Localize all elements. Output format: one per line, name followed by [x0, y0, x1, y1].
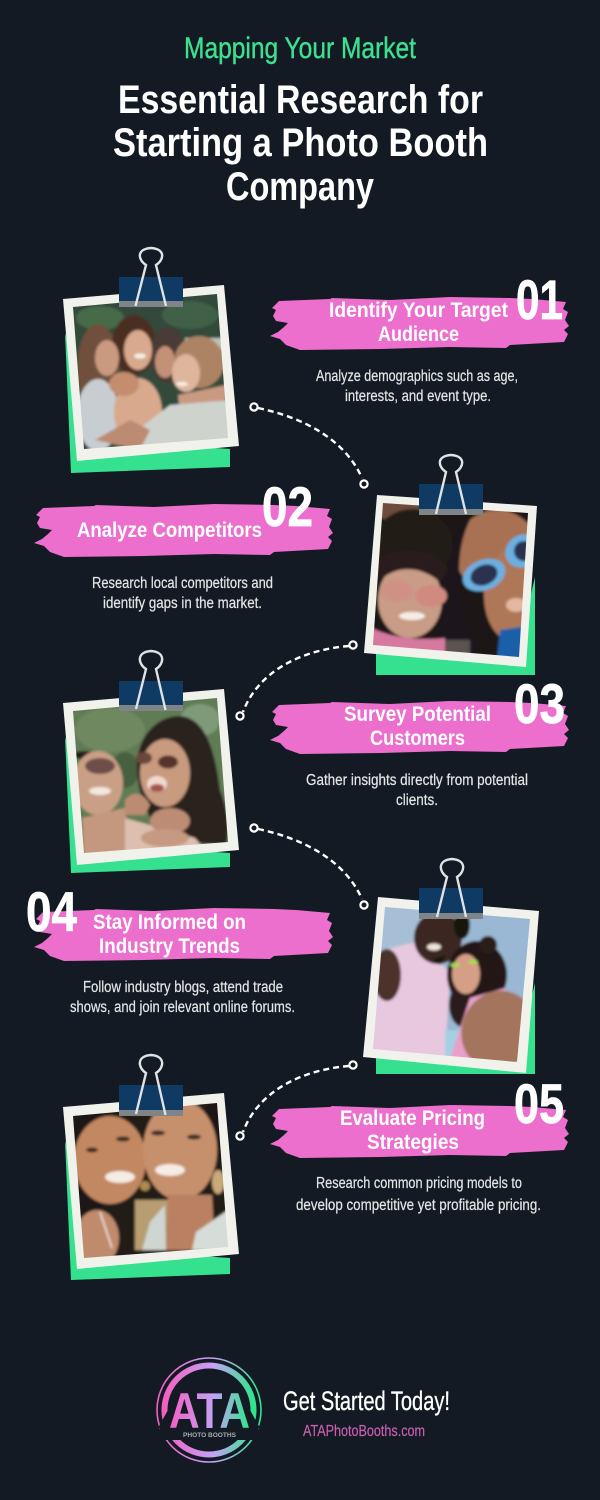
heading 5: Evaluate Pricing: [340, 1107, 485, 1130]
brush banner 1: [270, 297, 569, 350]
heading 1: [329, 299, 508, 346]
photo card 4: selfie couple: [363, 897, 548, 1081]
step 2: [34, 475, 333, 612]
number 04: 04: [26, 880, 77, 943]
number 01: 01: [516, 268, 563, 331]
heading 3: Customers: [370, 727, 465, 750]
description 3: Gather insights directly from potential: [306, 772, 528, 789]
call to action: [283, 1386, 450, 1440]
binder clip 2: [419, 455, 483, 515]
description 1: interests, and event type.: [345, 388, 491, 405]
photo card 3: laughing couple: [60, 689, 240, 873]
description 2: [92, 575, 273, 612]
header: [113, 32, 488, 209]
heading 3: [344, 703, 491, 750]
description 4: shows, and join relevant online forums.: [70, 999, 295, 1016]
binder clip 5: [119, 1055, 183, 1116]
brush banner 5: [270, 1105, 569, 1158]
description 2: Research local competitors and: [92, 575, 273, 592]
description 5: [296, 1175, 541, 1214]
brush banner 2: [34, 504, 333, 557]
description 5: develop competitive yet profitable pricing.: [296, 1197, 541, 1214]
heading 4: Stay Informed on: [93, 911, 246, 934]
title: Essential Research for: [118, 78, 483, 122]
heading 1: Identify Your Target: [329, 299, 508, 322]
number 03: 03: [514, 672, 565, 735]
description 3: clients.: [396, 792, 438, 809]
description 5: Research common pricing models to: [316, 1175, 522, 1192]
binder clip 4: [419, 859, 483, 919]
connector 1 to 2: [250, 403, 368, 488]
heading 4: [93, 911, 246, 958]
description 2: identify gaps in the market.: [103, 595, 262, 612]
title: Starting a Photo Booth: [113, 121, 488, 165]
binder clip 3: [119, 651, 183, 711]
connector 2 to 3: [236, 641, 357, 720]
photo card 5: smiling friends: [60, 1093, 240, 1280]
number 05: 05: [514, 1072, 564, 1135]
call to action: ATAPhotoBooths.com: [303, 1423, 425, 1440]
description 4: [70, 979, 295, 1016]
step 5: [270, 1072, 569, 1214]
heading 2: Analyze Competitors: [77, 519, 262, 542]
photo card 2: friends in sunglasses: [364, 495, 547, 675]
subtitle: Mapping Your Market: [184, 32, 417, 65]
step 1: [270, 268, 569, 405]
logo: ATA Photo Booths: PHOTO BOOTHS: [183, 1432, 237, 1439]
brush banner 4: [34, 908, 333, 961]
step 4: [26, 880, 333, 1016]
heading 4: Industry Trends: [99, 935, 240, 958]
title: [113, 78, 488, 209]
description 1: Analyze demographics such as age,: [316, 368, 518, 385]
description 3: [306, 772, 528, 809]
title: Company: [226, 165, 375, 209]
description 4: Follow industry blogs, attend trade: [83, 979, 283, 996]
brush banner 3: [270, 701, 569, 754]
heading 5: Strategies: [367, 1131, 459, 1154]
logo: ATA Photo Booths: ATA: [169, 1383, 250, 1439]
connector 4 to 5: [236, 1061, 357, 1140]
number 02: 02: [262, 475, 313, 538]
heading 1: Audience: [378, 323, 459, 346]
call to action: Get Started Today!: [283, 1386, 450, 1416]
description 1: [316, 368, 518, 405]
binder clip 1: [119, 248, 183, 307]
step 3: [270, 672, 569, 809]
connector 3 to 4: [250, 824, 368, 909]
logo: ATA Photo Booths: [157, 1358, 261, 1462]
heading 3: Survey Potential: [344, 703, 491, 726]
photo card 1: group of friends: [60, 285, 240, 473]
heading 5: [340, 1107, 485, 1154]
